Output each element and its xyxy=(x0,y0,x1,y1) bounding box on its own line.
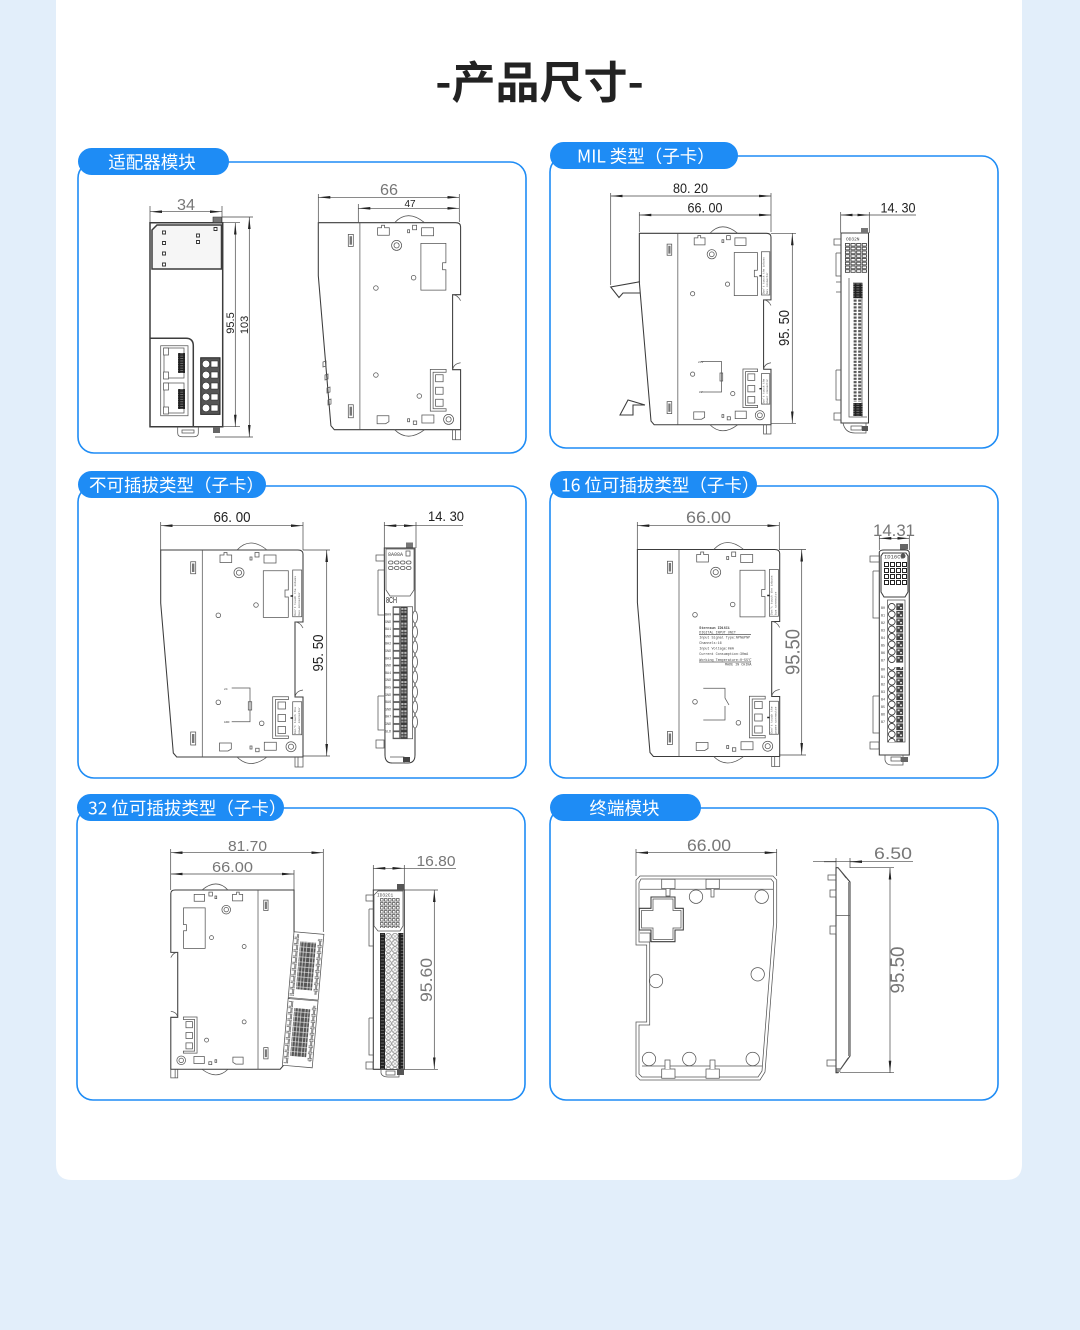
strip captions: bus connector xyxy=(297,592,301,616)
dimension 14.30: 14. 30 xyxy=(880,200,916,216)
terminal pin labels: B3 xyxy=(881,630,885,634)
end cap side drawing xyxy=(827,868,850,1073)
terminal pin labels: B5 xyxy=(881,644,885,648)
side section view: OD32N xyxy=(846,236,860,242)
terminal pin labels: B2 xyxy=(881,684,885,688)
terminal pin labels: BA7 xyxy=(385,716,391,720)
dimension lines front view xyxy=(150,197,253,437)
terminal pin labels: GND xyxy=(385,635,391,639)
terminal pin labels: GND xyxy=(385,650,391,654)
dimension 95.50: 95. 50 xyxy=(310,634,327,672)
dimension 34: 34 xyxy=(177,197,195,214)
terminal pin labels: B7 xyxy=(881,660,885,664)
tab heading: 不可插拔类型（子卡） xyxy=(89,472,264,498)
terminal pin labels: BA5 xyxy=(385,686,391,690)
strip captions: bus connector xyxy=(774,591,778,615)
dimension 95.5: 95.5 xyxy=(225,312,237,334)
front view drawing xyxy=(150,217,223,437)
dimension 66.00: 66. 00 xyxy=(688,200,723,216)
strip captions: Don't touch the inbuss xyxy=(770,575,774,615)
panel frame xyxy=(550,808,998,1100)
panel frame xyxy=(78,162,526,453)
terminal side view: ID16C1 xyxy=(884,554,905,560)
terminal pin labels: B3 xyxy=(881,691,885,695)
strip captions: bus connector xyxy=(765,272,769,294)
dimension lines xyxy=(637,508,915,755)
terminal pin labels: B1 xyxy=(881,614,885,618)
dimension 103: 103 xyxy=(239,316,251,334)
strip captions xyxy=(762,257,769,404)
terminal side view xyxy=(376,542,418,763)
terminal side view: 8A08A xyxy=(388,552,403,558)
terminal pin labels: B0 xyxy=(881,668,885,672)
side view drawing xyxy=(637,542,780,766)
internal wire xyxy=(701,362,723,392)
panel: 32-point pluggable type xyxy=(77,794,525,1100)
white card xyxy=(56,0,1022,1180)
strip captions: Don't touch the xyxy=(293,707,297,734)
terminal side view: 8CH xyxy=(386,596,397,605)
nameplate text: DIGITAL INPUT UNIT xyxy=(699,632,736,636)
strip captions: Don't touch the inbuss xyxy=(293,576,297,616)
strip captions xyxy=(770,575,778,734)
side section view xyxy=(834,228,868,433)
terminal pin labels: BA3 xyxy=(385,657,391,661)
strip captions: Don't touch the xyxy=(762,379,766,404)
terminal pin labels: GND xyxy=(385,708,391,712)
panel frame xyxy=(77,808,525,1100)
dimension 81.70: 81.70 xyxy=(228,838,267,855)
terminal pin labels: B5 xyxy=(881,706,885,710)
terminal pin labels: B0 xyxy=(881,607,885,611)
side view drawing xyxy=(171,884,324,1078)
panel: MIL type xyxy=(550,142,998,448)
side view drawing: 24 xyxy=(224,688,228,691)
nameplate text: Sternsun ID16C1 xyxy=(699,626,730,631)
terminal pin labels: B4 xyxy=(881,698,885,702)
terminal side view xyxy=(870,544,909,765)
strip captions xyxy=(293,576,301,734)
dimension 47: 47 xyxy=(404,199,416,210)
panel: adapter module xyxy=(78,148,526,453)
terminal side view xyxy=(366,884,404,1077)
dimension lines xyxy=(611,180,916,423)
terminal pin labels: BA4 xyxy=(385,672,391,676)
nameplate text: Channels:16 xyxy=(699,641,722,646)
strip captions: Don't touch the xyxy=(770,706,774,734)
side view drawing xyxy=(318,216,461,440)
end cap front drawing xyxy=(636,876,777,1080)
nameplate text: Input Signal Type:NPN&PNP xyxy=(699,636,750,640)
tab heading: 适配器模块 xyxy=(108,150,196,174)
strip captions: power connector xyxy=(298,707,301,734)
panel frame xyxy=(550,156,998,448)
dimension 66.00: 66. 00 xyxy=(214,509,250,526)
terminal pin labels: BA6 xyxy=(385,701,391,705)
dimension 66.00: 66.00 xyxy=(212,859,253,876)
dimension 95.50: 95. 50 xyxy=(776,310,793,346)
side view drawing: GND xyxy=(224,721,230,724)
strip captions: power connector xyxy=(775,706,778,734)
tab heading: 终端模块 xyxy=(590,796,660,820)
terminal pin labels: BA0 xyxy=(385,614,391,618)
terminal side view: ID32C1 xyxy=(377,892,394,898)
strip captions: power connector xyxy=(766,379,769,404)
side view drawing xyxy=(161,543,303,767)
panel: terminal module xyxy=(550,794,998,1100)
dimension lines side view xyxy=(318,182,459,222)
tab heading xyxy=(550,142,738,169)
tab heading xyxy=(78,148,229,175)
angled terminal module xyxy=(282,932,324,1068)
nameplate text: Input Voltage:0mA xyxy=(699,646,735,652)
dimension 95.50: 95.50 xyxy=(782,629,804,675)
terminal pin labels: GND xyxy=(385,679,391,683)
dimension lines xyxy=(171,838,456,1069)
terminal pin labels: B7 xyxy=(881,721,885,725)
terminal pin labels: BA2 xyxy=(385,643,391,647)
title: -产品尺寸- xyxy=(435,47,644,111)
dimension 66.00: 66.00 xyxy=(687,836,731,855)
dimension 14.31: 14.31 xyxy=(873,521,915,540)
terminal pin labels: GND xyxy=(385,621,391,625)
terminal pin labels: GND xyxy=(385,694,391,698)
panel: non-pluggable type xyxy=(78,471,526,778)
dimension 66: 66 xyxy=(380,182,398,199)
terminal pin labels: B2 xyxy=(881,622,885,626)
dimension 16.80: 16.80 xyxy=(416,853,456,870)
side view drawing: 24V xyxy=(698,361,704,364)
tab heading: 32 位可插拔类型（子卡） xyxy=(88,796,286,820)
terminal pin labels: B6 xyxy=(881,652,885,656)
dimension 95.60: 95.60 xyxy=(417,958,436,1002)
terminal pin labels: GND xyxy=(385,665,391,669)
dimension 95.50: 95.50 xyxy=(888,946,909,994)
panel frame xyxy=(78,486,526,778)
dimension 66.00: 66.00 xyxy=(686,508,731,527)
terminal pin labels: B6 xyxy=(881,714,885,718)
tab heading xyxy=(550,794,701,821)
terminal pin labels: SLD xyxy=(385,730,391,734)
side view drawing: 0V xyxy=(699,391,703,394)
panel: 16-point pluggable type xyxy=(550,471,998,778)
panel frame xyxy=(550,486,998,778)
locking levers xyxy=(611,282,645,415)
nameplate text: MADE IN CHINA xyxy=(725,664,752,668)
dimension 14.30: 14. 30 xyxy=(428,508,464,524)
terminal pin labels: B4 xyxy=(881,637,885,641)
nameplate text: Current Consumption:30mA xyxy=(699,652,749,657)
terminal pin labels: BA1 xyxy=(385,628,391,632)
side view drawing xyxy=(611,227,771,434)
tab heading: 16 位可插拔类型（子卡） xyxy=(561,472,759,498)
dimension lines xyxy=(636,836,913,1073)
terminal pin labels: GND xyxy=(385,723,391,727)
internal wire xyxy=(232,688,252,722)
nameplate text xyxy=(699,626,752,668)
dimension 80.20: 80. 20 xyxy=(673,180,708,196)
nameplate text: Working Temperature:0~55℃ xyxy=(699,658,752,663)
tab heading: MIL 类型（子卡） xyxy=(577,144,715,168)
strip captions: Don't touch the inbuss xyxy=(762,257,766,294)
dimension 6.50: 6.50 xyxy=(874,844,912,863)
internal wire xyxy=(703,688,729,720)
terminal pin labels: B1 xyxy=(881,676,885,680)
dimension lines xyxy=(161,508,464,756)
